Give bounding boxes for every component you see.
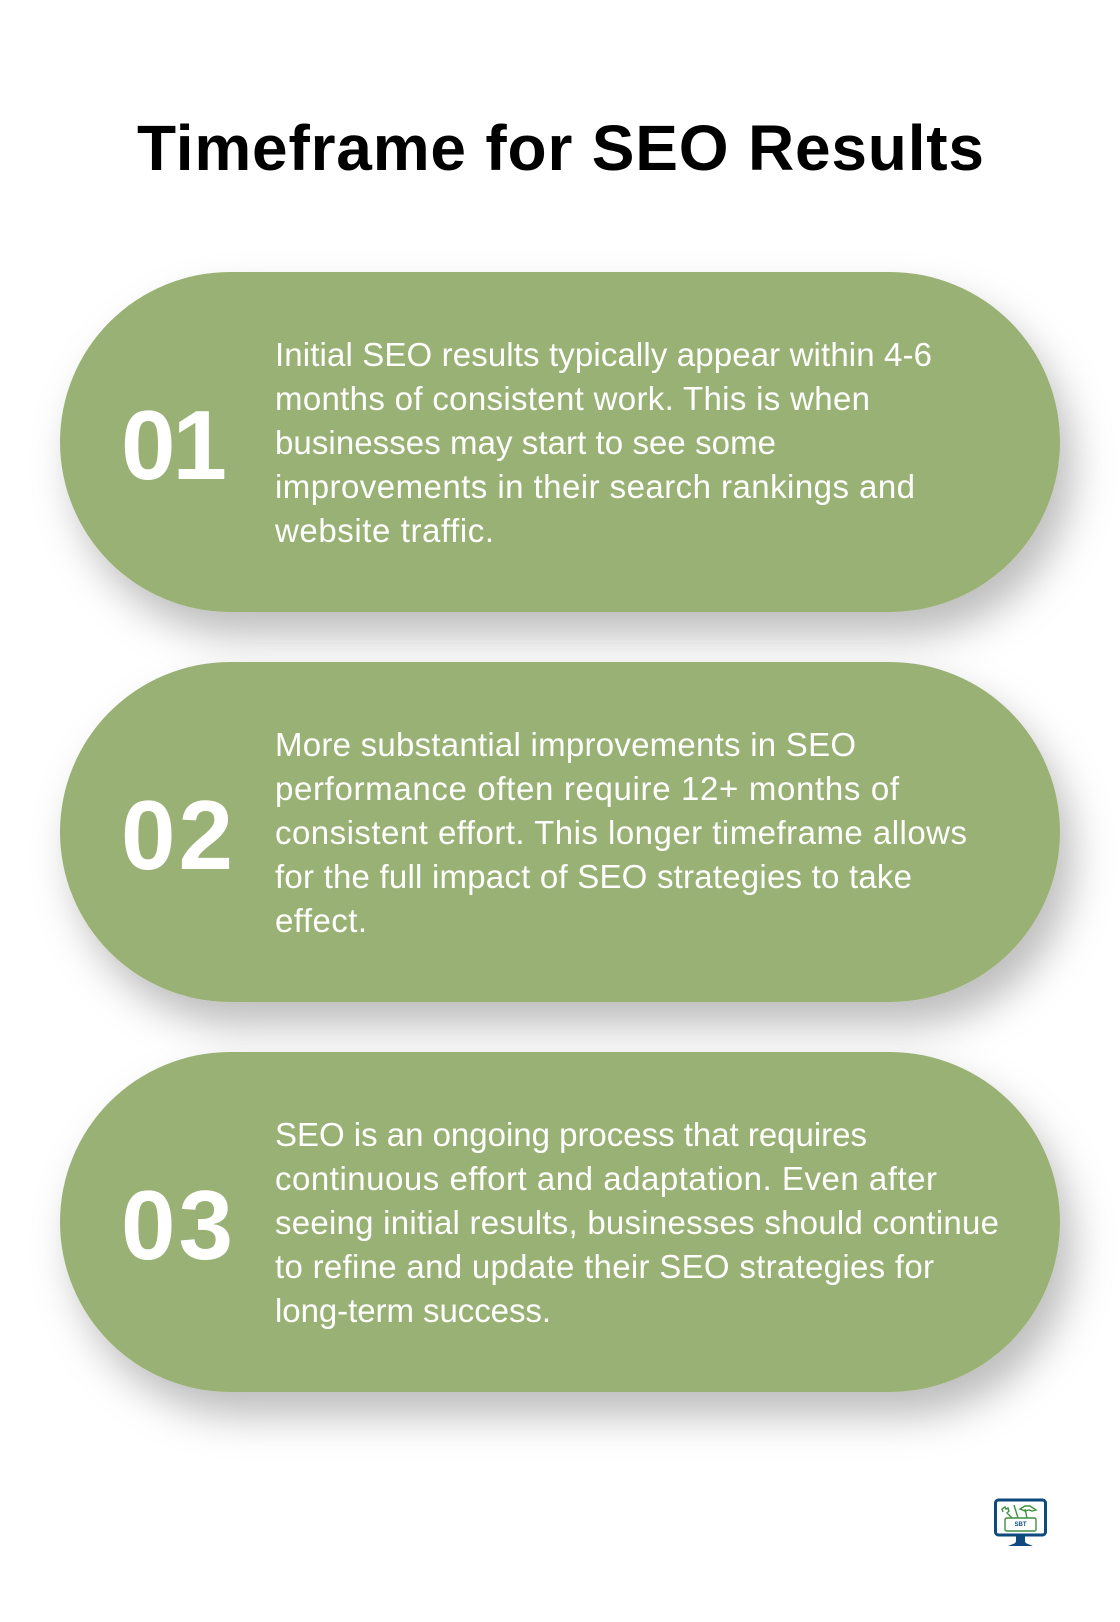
icon: monitor with toolbox logo	[996, 1500, 1046, 1546]
text block 03: continuous effort and adaptation. Even after	[275, 1160, 937, 1197]
panel: step 01	[60, 272, 1060, 612]
panel: step 03	[60, 1052, 1060, 1392]
text block 03: long-term success.	[275, 1292, 551, 1329]
text block 01	[274, 336, 932, 549]
text block 01: website traffic.	[274, 512, 494, 549]
text block 03: to refine and update their SEO strategies for	[275, 1248, 934, 1285]
text block 03: SEO is an ongoing process that requires	[275, 1116, 867, 1153]
number 02: 02	[121, 780, 233, 890]
text block 02	[275, 726, 967, 939]
text block 02: for the full impact of SEO strategies to take	[275, 858, 912, 895]
text block 01: improvements in their search rankings and	[275, 468, 915, 505]
text block 02: consistent effort. This longer timeframe allows	[275, 814, 967, 851]
pill background 03	[60, 1052, 1060, 1392]
text block 02: performance often require 12+ months of	[275, 770, 900, 807]
text block 01: Initial SEO results typically appear within 4-6	[275, 336, 932, 373]
text block 01: months of consistent work. This is when	[275, 380, 870, 417]
text block 03: seeing initial results, businesses should continue	[275, 1204, 999, 1241]
text block 01: businesses may start to see some	[275, 424, 776, 461]
text block 03	[275, 1116, 999, 1329]
text block 02: More substantial improvements in SEO	[275, 726, 856, 763]
pill background 02	[60, 662, 1060, 1002]
text block 02: effect.	[275, 902, 367, 939]
pill background 01	[60, 272, 1060, 612]
icon: monitor with toolbox logo: SBT	[1014, 1522, 1027, 1528]
number 01: 01	[121, 390, 227, 500]
panel: step 02	[60, 662, 1060, 1002]
title: Timeframe for SEO Results	[137, 112, 984, 184]
number 03: 03	[121, 1170, 233, 1280]
